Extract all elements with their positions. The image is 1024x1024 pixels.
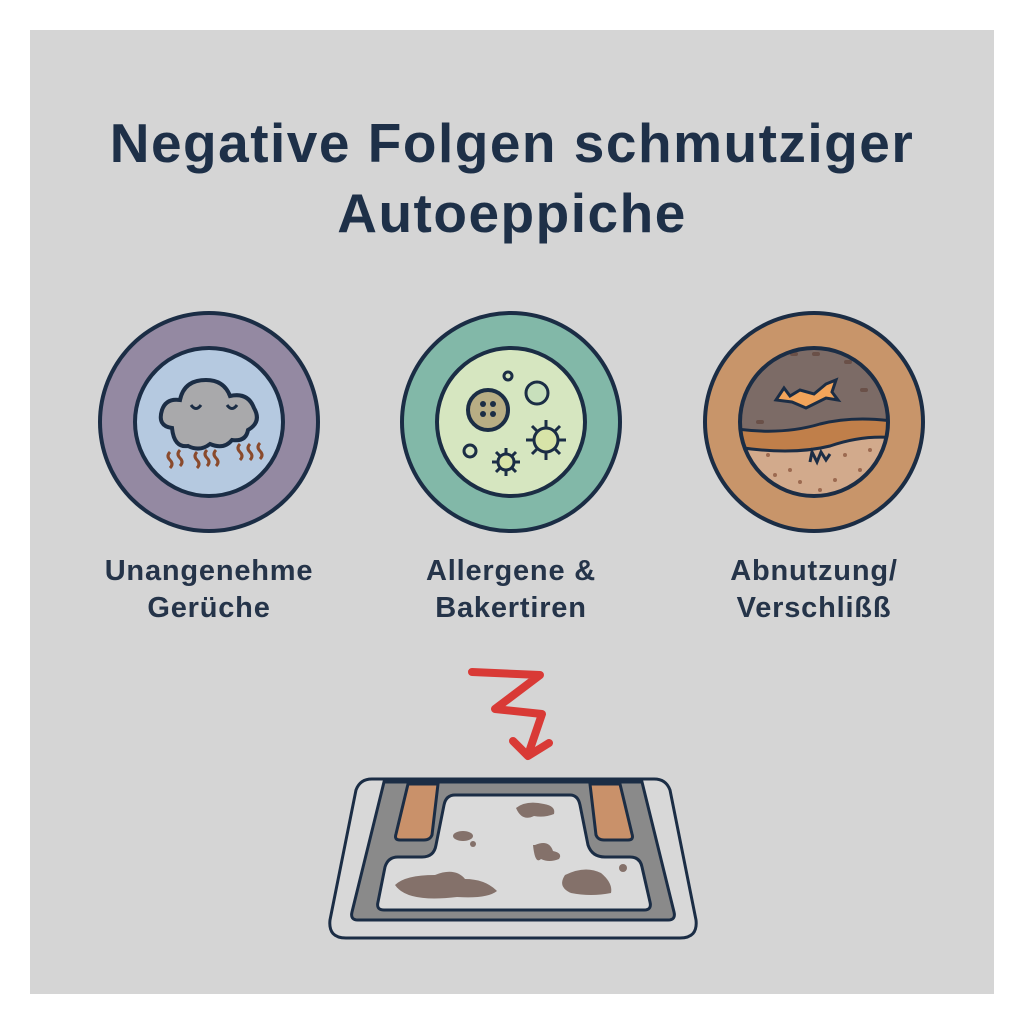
label: allergens: [426, 555, 596, 624]
arrow: red zigzag: [472, 672, 549, 756]
icon: odor cloud: [100, 313, 318, 531]
label: wear: Verschlißß: [737, 592, 891, 624]
icon: dirty car mat: [330, 779, 696, 938]
title: Negative Folgen schmutziger: [110, 112, 914, 174]
label: odors: Gerüche: [147, 592, 271, 624]
label: wear: Abnutzung/: [730, 555, 898, 587]
label: odors: Unangenehme: [105, 555, 313, 587]
label: odors: [105, 555, 313, 624]
icon: wear layers: [705, 313, 923, 531]
title: Autoeppiche: [337, 182, 687, 244]
icon: bacteria: [402, 313, 620, 531]
icons: [98, 311, 925, 940]
title: [110, 112, 914, 244]
label: allergens: Bakertiren: [435, 592, 587, 624]
label: allergens: Allergene &: [426, 555, 596, 587]
label: wear: [730, 555, 898, 624]
